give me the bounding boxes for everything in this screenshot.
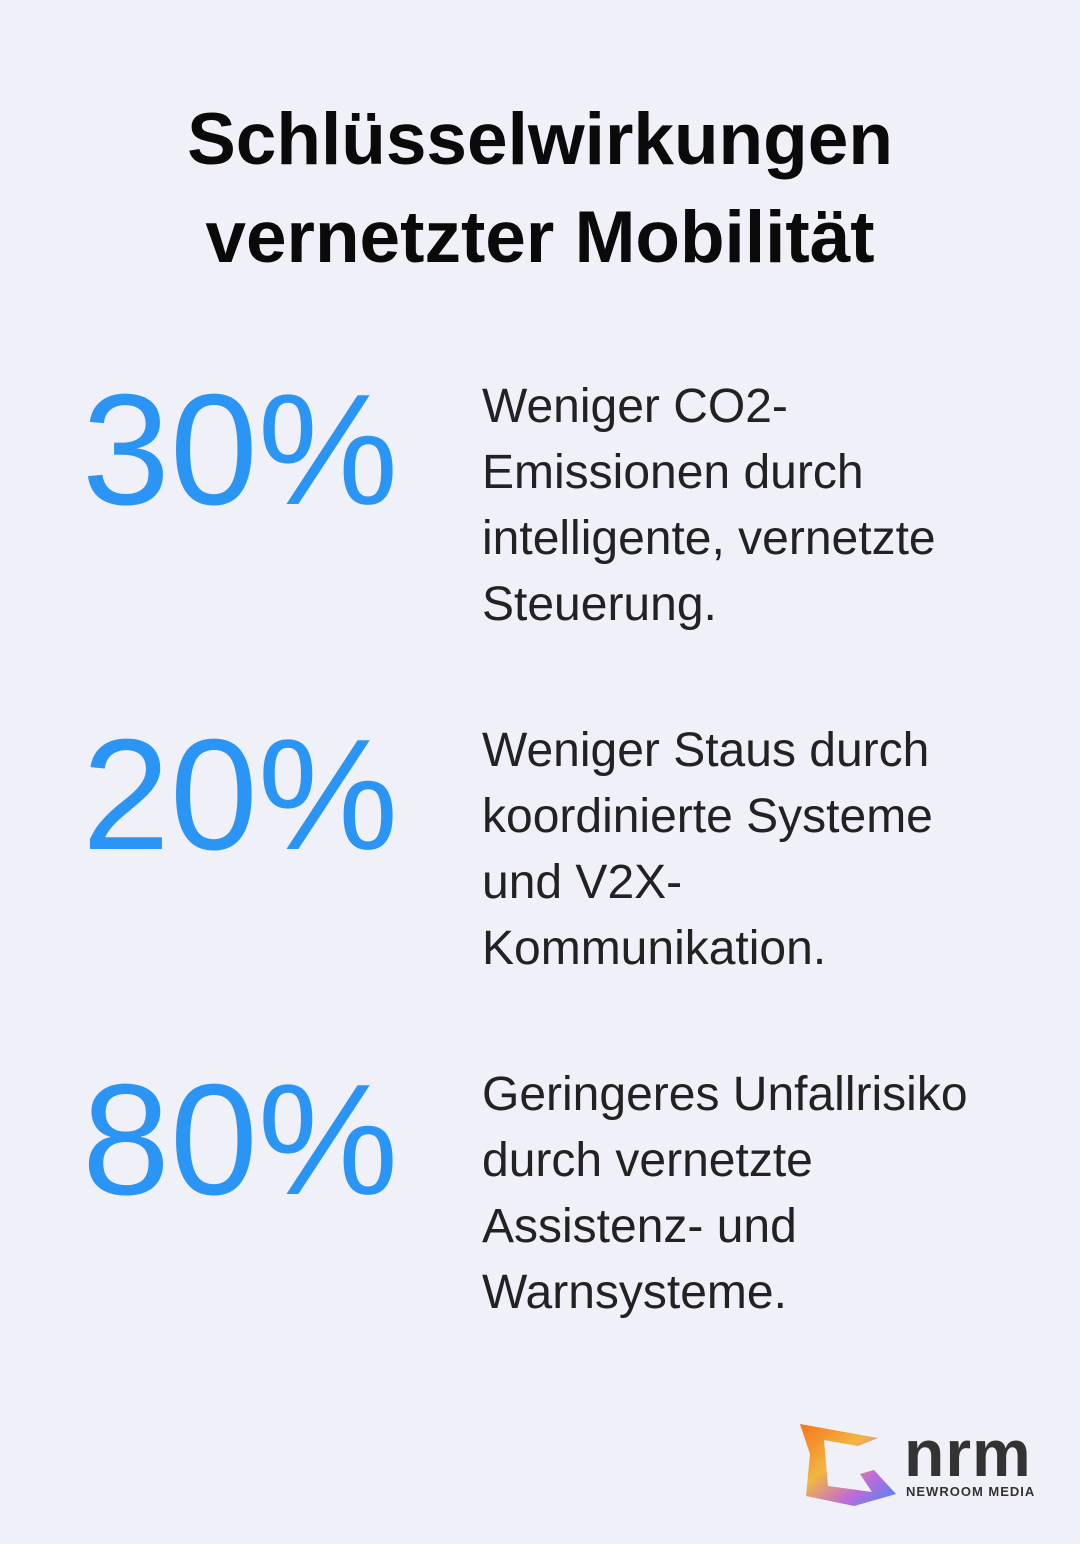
- title: vernetzter Mobilität: [205, 197, 875, 278]
- text: 30% description: intelligente, vernetzte: [482, 512, 936, 565]
- text: 30% description: Steuerung.: [482, 578, 717, 631]
- title: Schlüsselwirkungen: [187, 99, 893, 180]
- icon: logo mark: [800, 1424, 896, 1506]
- text: 20% description: Kommunikation.: [482, 922, 826, 975]
- stat: 80%: 80%: [82, 1052, 398, 1228]
- logo text: nrm: [904, 1416, 1032, 1490]
- text: 80% description: durch vernetzte: [482, 1134, 813, 1187]
- stat: 20%: 20%: [82, 707, 398, 883]
- text: 20% description: und V2X-: [482, 856, 682, 909]
- text: 30% description: Emissionen durch: [482, 446, 864, 499]
- text: 80% description: Geringeres Unfallrisiko: [482, 1068, 968, 1121]
- text: 20% description: Weniger Staus durch: [482, 724, 929, 777]
- logo: NEWROOM MEDIA: [906, 1484, 1035, 1499]
- text: 80% description: [482, 1068, 968, 1319]
- text: 30% description: Weniger CO2-: [482, 380, 788, 433]
- text: 80% description: Warnsysteme.: [482, 1266, 787, 1319]
- text: 20% description: koordinierte Systeme: [482, 790, 933, 843]
- logo: [800, 1416, 1035, 1506]
- stat: 30%: 30%: [82, 362, 398, 538]
- text: 30% description: [482, 380, 936, 631]
- title: [187, 99, 893, 278]
- text: 80% description: Assistenz- und: [482, 1200, 797, 1253]
- text: 20% description: [482, 724, 933, 975]
